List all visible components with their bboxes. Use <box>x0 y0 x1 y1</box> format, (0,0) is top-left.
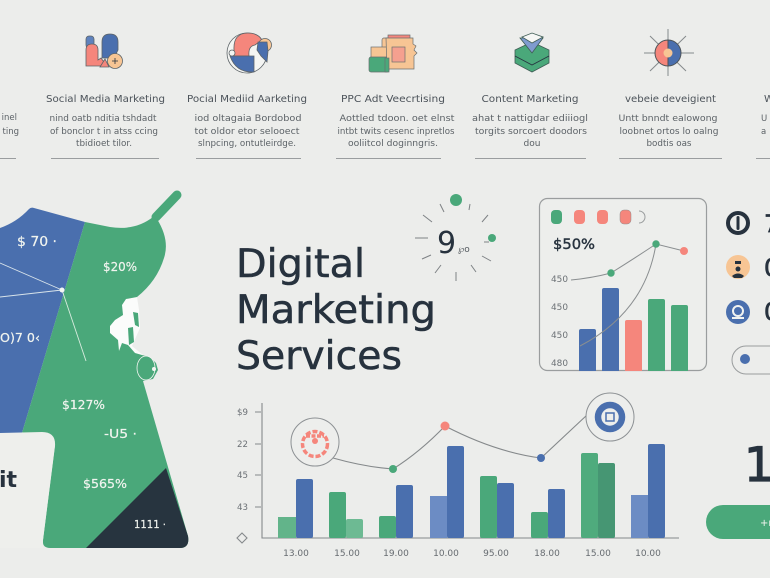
heading: Social Media Marketing <box>46 94 165 105</box>
gauge dot right <box>488 234 496 242</box>
panel: services row <box>0 29 770 158</box>
partial service column right: a <box>761 127 766 137</box>
x axis labels: 18.00 <box>534 549 560 559</box>
panel: bottom bar chart <box>237 393 679 559</box>
axes <box>237 403 679 543</box>
map values: $565% <box>83 477 127 491</box>
icon: person on peach <box>726 255 750 279</box>
icon: ad boxes <box>369 35 417 72</box>
description <box>472 114 588 149</box>
axis labels: 450 <box>551 275 568 285</box>
partial service column left: inel <box>2 113 17 123</box>
map values: $ 70 · <box>17 235 57 250</box>
gauge unit: ℘o <box>458 245 470 255</box>
description: dou <box>524 139 540 149</box>
icon: social people <box>86 34 122 68</box>
trend lines <box>571 244 684 346</box>
description <box>618 114 718 149</box>
x axis labels: 15.00 <box>585 549 611 559</box>
icon: social circle <box>227 33 272 73</box>
heading: vebeie deveigient <box>625 94 716 105</box>
title <box>236 242 436 379</box>
map segment: dark corner <box>86 468 188 548</box>
service: content marketing <box>472 33 588 158</box>
description <box>50 114 158 149</box>
axis labels: 450 <box>551 331 568 341</box>
title: Services <box>236 334 402 379</box>
heading: Content Marketing <box>482 94 578 105</box>
map values: -U5 · <box>104 427 137 441</box>
description: of bonclor t in atss ccing <box>50 127 158 137</box>
description <box>194 114 302 149</box>
bars <box>579 288 688 371</box>
x axis labels <box>283 549 661 559</box>
gauge dot top <box>450 194 462 206</box>
trend line <box>333 415 587 469</box>
overlay card <box>0 432 55 548</box>
icon: target with spokes <box>644 29 694 76</box>
partial service column right <box>756 94 770 158</box>
panel: bar line chart card <box>540 198 706 371</box>
pill control <box>732 346 770 374</box>
callout: salmon face icon <box>291 418 339 466</box>
map values: $20% <box>103 260 137 274</box>
x axis labels: 13.00 <box>283 549 309 559</box>
y axis labels: 43 <box>237 503 248 513</box>
gauge ticks <box>415 204 491 281</box>
map segment: white continent <box>108 297 158 381</box>
panel: map pie chart <box>0 195 188 548</box>
description: slnpcing, ontutleirdge. <box>198 139 296 149</box>
callout: blue badge icon <box>586 393 634 441</box>
trend points <box>389 422 545 473</box>
legend pills <box>551 210 645 224</box>
description: nind oatb nditia tshdadt <box>50 114 157 124</box>
title: Marketing <box>236 288 436 333</box>
icon: person on blue <box>726 300 750 324</box>
map tail <box>156 195 177 217</box>
headline value: $50% <box>553 237 595 253</box>
axis labels <box>551 275 568 369</box>
service: ppc advertising <box>336 35 455 158</box>
x axis labels: 95.00 <box>483 549 509 559</box>
heading: Pocial Mediid Aarketing <box>187 94 307 105</box>
y axis labels <box>237 408 248 513</box>
description: tot oldor etor selooect <box>194 127 300 137</box>
description: tbidioet tilor. <box>76 139 132 149</box>
service: social media marketing <box>46 34 165 158</box>
description: loobnet ortos lo oalng <box>620 127 718 137</box>
description: Untt bnndt ealowong <box>618 114 718 124</box>
map islands <box>128 312 156 380</box>
green button <box>706 505 770 539</box>
y axis labels: 45 <box>237 471 248 481</box>
description: iod oltagaia Bordobod <box>194 114 302 124</box>
partial service column left <box>0 113 19 158</box>
map values <box>0 235 166 531</box>
description <box>338 114 455 149</box>
connector lines <box>0 263 86 361</box>
y axis labels: 22 <box>237 440 248 450</box>
map values: O)7 0‹ <box>0 331 40 345</box>
trend points <box>607 240 688 277</box>
description: ooliitcol doginngris. <box>348 139 438 149</box>
description: bodtis oas <box>646 139 692 149</box>
description: ahat t nattigdar ediiiogl <box>472 114 588 124</box>
x axis labels: 19.00 <box>383 549 409 559</box>
heading: PPC Adt Veecrtising <box>341 94 445 105</box>
gauge value: 9 <box>437 226 456 261</box>
bars <box>278 444 665 538</box>
x axis labels: 10.00 <box>433 549 459 559</box>
axis labels: 450 <box>551 303 568 313</box>
title: Digital <box>236 242 365 287</box>
service: second social media marketing <box>187 33 307 158</box>
partial service column left: ting <box>3 127 19 137</box>
map values: $127% <box>62 398 105 412</box>
service: website development <box>618 29 722 158</box>
description: torgits sorcoert doodors <box>475 127 588 137</box>
description: Aottled tdoon. oet elnst <box>340 114 455 124</box>
map segment: green <box>22 217 188 548</box>
map segment: blue <box>0 208 85 433</box>
x axis labels: 15.00 <box>334 549 360 559</box>
map values: 1111 · <box>134 518 166 531</box>
icon: dark ring <box>728 213 748 233</box>
panel: right stats <box>726 210 770 374</box>
y axis labels: $9 <box>237 408 248 418</box>
axis labels: 480 <box>551 359 568 369</box>
partial service column right: U <box>761 114 767 124</box>
x axis labels: 10.00 <box>635 549 661 559</box>
description: intbt twits cesenc inpretlos <box>338 127 455 137</box>
icon: stacked cube <box>515 33 549 72</box>
gauge <box>415 194 496 281</box>
